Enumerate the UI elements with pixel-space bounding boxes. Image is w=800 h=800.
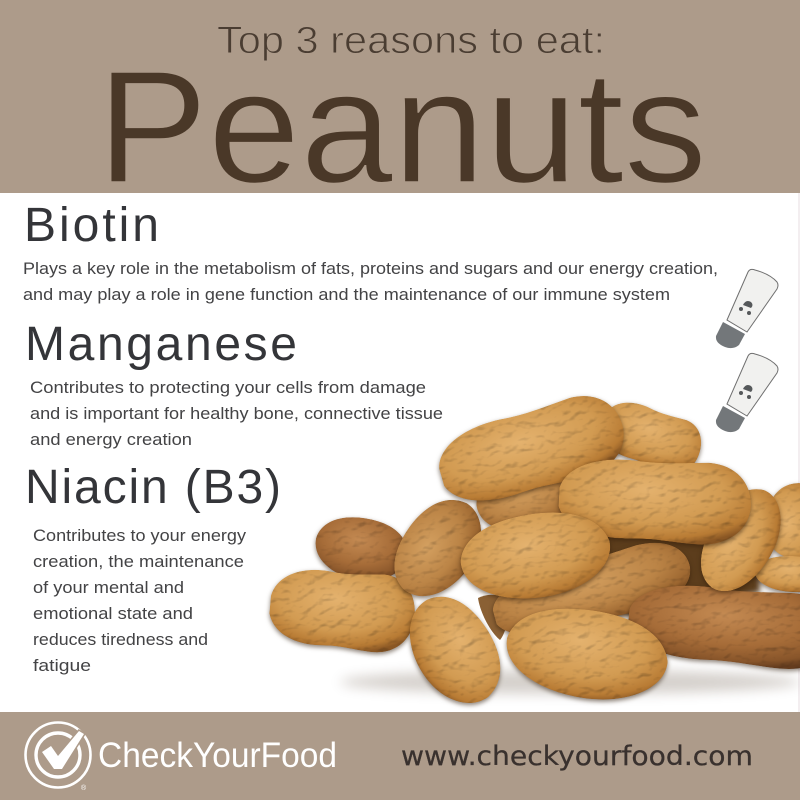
section: niacin — [25, 461, 281, 675]
text: niacin description: creation, the maintenance — [33, 552, 244, 571]
title: Peanuts — [97, 37, 707, 216]
text: biotin description: Plays a key role in the metabolism of fats, proteins and sugars and our energy creation, — [23, 259, 718, 278]
logo wordmark: CheckYourFood — [98, 736, 337, 775]
text: niacin description: emotional state and — [33, 604, 193, 623]
text: niacin description — [33, 526, 247, 675]
text: niacin description: fatigue — [33, 656, 91, 675]
icon: salt shaker bottom — [716, 353, 778, 432]
heading: biotin: Biotin — [24, 199, 159, 252]
header band — [0, 0, 800, 216]
text: manganese description: and energy creation — [30, 430, 192, 449]
section: biotin — [23, 199, 718, 304]
heading: manganese: Manganese — [25, 318, 297, 371]
subtitle: Top 3 reasons to eat: — [217, 20, 605, 62]
text: niacin description: of your mental and — [33, 578, 184, 597]
text: manganese description: Contributes to protecting your cells from damage — [30, 378, 426, 397]
icon: salt shaker top — [716, 269, 778, 348]
text: manganese description: and is important for healthy bone, connective tissue — [30, 404, 443, 423]
text: niacin description: reduces tiredness and — [33, 630, 208, 649]
heading: niacin: Niacin (B3) — [25, 461, 281, 514]
section: manganese — [25, 318, 443, 449]
text: biotin description — [23, 259, 718, 304]
text: manganese description — [30, 378, 443, 449]
peanut pile image — [267, 386, 800, 720]
text: niacin description: Contributes to your energy — [33, 526, 247, 545]
footer band — [0, 712, 800, 800]
text: biotin description: and may play a role in gene function and the maintenance of our immune system — [23, 285, 670, 304]
icon: check logo — [26, 722, 90, 792]
icon: check logo: ® — [81, 784, 87, 792]
website url: www.checkyourfood.com — [401, 741, 753, 772]
